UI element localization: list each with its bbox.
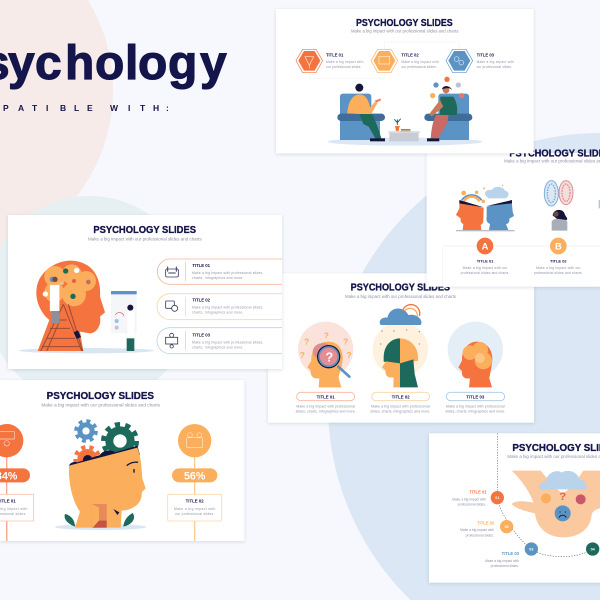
text: title 03: Make a big impact with xyxy=(485,559,519,563)
column: 56%: 56% xyxy=(184,470,206,482)
illustration: hands and cloud xyxy=(512,471,600,537)
text: title 01: Make a big impact with xyxy=(452,497,486,501)
head puzzle with cloud xyxy=(380,305,421,387)
labels: slides, charts, infographics and more. xyxy=(296,409,356,413)
labels: Make a big impact with professional xyxy=(371,404,430,408)
hexagon: title 01: Make a big impact with xyxy=(326,60,364,64)
panel: percentage head slide: Make a big impact with our professional slides and charts xyxy=(41,402,160,407)
text: title 03 xyxy=(485,551,520,568)
head with brain xyxy=(458,342,492,387)
text: title 03: professional slides. xyxy=(491,564,519,568)
letter box xyxy=(443,238,600,287)
panel: three heads slide xyxy=(268,273,534,423)
head with magnifier: ? xyxy=(300,350,305,360)
hexagon: title 03 xyxy=(446,49,514,73)
illustration: brains and woman xyxy=(544,181,600,231)
letter box: Make a big impact with our xyxy=(536,266,582,270)
illustration: head and doctors xyxy=(19,261,154,353)
head with magnifier: ? xyxy=(304,337,309,347)
panel: three heads slide: PSYCHOLOGY SLIDES xyxy=(351,283,450,294)
hexagon: title 02 xyxy=(371,49,439,73)
labels xyxy=(296,392,505,413)
text: title 02: TITLE 02 xyxy=(477,520,495,525)
labels: TITLE 03 xyxy=(466,394,485,399)
hexagon: title 02: TITLE 02 xyxy=(401,53,419,58)
timeline: 04 xyxy=(591,547,596,551)
labels: Make a big impact with professional xyxy=(446,404,505,408)
panel: therapy session slide: Make a big impact with our professional slides and charts xyxy=(351,29,458,34)
illustration: hands and cloud: ? xyxy=(559,491,566,503)
text: title 01: TITLE 01 xyxy=(469,490,487,495)
letter box: professional slides and charts. xyxy=(461,271,509,275)
labels: slides, charts, infographics and more. xyxy=(370,409,430,413)
hexagon: title 02: Make a big impact with xyxy=(401,60,439,64)
panel: hands timeline slide xyxy=(429,433,600,583)
panel: therapy session slide xyxy=(276,9,534,153)
head with magnifier: ? xyxy=(346,350,352,360)
column: 34% xyxy=(0,424,34,541)
text: title 03: TITLE 03 xyxy=(502,551,520,556)
card: title 02: TITLE 02 xyxy=(192,298,211,303)
card: title 02: Make a big impact with professional slides, xyxy=(192,306,263,310)
timeline: 02 xyxy=(505,525,509,529)
letter box: TITLE 01 xyxy=(477,258,494,263)
labels: slides, charts, infographics and more. xyxy=(445,409,505,413)
column: 56%: Make a big impact with xyxy=(174,507,215,511)
timeline: 03 xyxy=(529,547,533,551)
labels: TITLE 01 xyxy=(317,394,335,399)
card: title 03: charts, infographics and more. xyxy=(192,345,243,349)
hexagon: title 01: our professional slides. xyxy=(326,65,361,69)
text: title 01 xyxy=(452,490,487,507)
card: title 02: charts, infographics and more. xyxy=(192,311,243,315)
card: title 01: charts, infographics and more. xyxy=(192,276,243,280)
column: 56% xyxy=(168,424,222,541)
text: title 02: professional slides. xyxy=(466,533,494,537)
timeline: 01 xyxy=(495,496,499,500)
card: title 03: TITLE 03 xyxy=(192,332,211,337)
panel: A B heads slide xyxy=(427,149,600,287)
letter box: A xyxy=(482,241,489,251)
head with magnifier: ? xyxy=(324,330,329,340)
hexagon: title 03: our professional slides. xyxy=(477,65,512,69)
head with magnifier xyxy=(300,330,352,387)
text: title 02 xyxy=(460,520,495,537)
column: 56%: TITLE 02 xyxy=(186,499,204,504)
card: title 02 xyxy=(157,294,282,320)
card: title 03 xyxy=(157,328,282,354)
letter box: TITLE 02 xyxy=(550,258,567,263)
panel: head with ladder slide: Make a big impact with our professional slides and charts xyxy=(88,237,202,242)
panel: therapy session slide: PSYCHOLOGY SLIDES xyxy=(356,18,453,29)
card: title 01 xyxy=(157,259,282,284)
letter box: professional slides and charts. xyxy=(534,271,583,275)
card: title 01: Make a big impact with professional slides, xyxy=(192,271,263,275)
panel: head with ladder slide xyxy=(8,215,282,369)
labels: Make a big impact with professional xyxy=(296,404,355,408)
panel: percentage head slide xyxy=(0,380,244,541)
head with magnifier: ? xyxy=(343,337,348,347)
panel: three heads slide: Make a big impact with our professional slides and charts xyxy=(345,294,456,299)
hexagon: title 01 xyxy=(296,49,364,73)
text: title 01: professional slides. xyxy=(458,503,486,507)
hexagon: title 02: our professional slides. xyxy=(401,65,437,69)
head with magnifier: ? xyxy=(325,350,333,364)
card: title 03: Make a big impact with professional slides, xyxy=(192,340,263,344)
letter box: B xyxy=(555,241,562,251)
labels: TITLE 02 xyxy=(392,394,410,399)
timeline xyxy=(491,433,599,557)
column: 56%: our professional slides. xyxy=(175,512,214,516)
illustration: head with gears xyxy=(55,421,146,530)
panel: percentage head slide: PSYCHOLOGY SLIDES xyxy=(47,391,154,402)
hexagon: title 03: TITLE 03 xyxy=(477,53,495,58)
illustration: therapist and patient xyxy=(328,77,482,146)
hexagon: title 01: TITLE 01 xyxy=(326,53,344,58)
hexagon: title 03: Make a big impact with xyxy=(477,60,514,64)
letter box: Make a big impact with our xyxy=(463,266,508,270)
text: title 02: Make a big impact with xyxy=(460,528,494,532)
card: title 01: TITLE 01 xyxy=(192,263,211,268)
illustration: two heads xyxy=(456,185,515,231)
panel: head with ladder slide: PSYCHOLOGY SLIDES xyxy=(93,225,196,236)
